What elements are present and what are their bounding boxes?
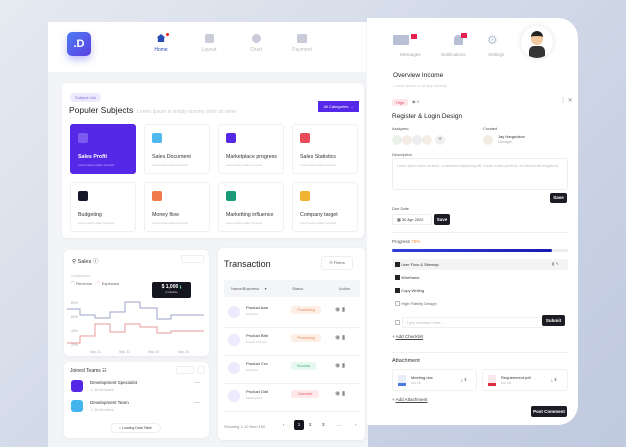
line chart: Sep 22 bbox=[119, 350, 130, 354]
right panel: task detail: ⤓ ▮ bbox=[551, 377, 557, 382]
subject grid: Sales Document bbox=[152, 154, 191, 160]
subject grid: Lorem ipsum dolor sit amet bbox=[78, 221, 114, 225]
subject grid: Lorem ipsum dolor sit amet bbox=[152, 221, 188, 225]
tooltip: profitable bbox=[165, 290, 178, 294]
nav: chart: Chart bbox=[250, 47, 262, 53]
right panel: task detail: ⋮ ✕ bbox=[560, 98, 573, 104]
checklist: Submit bbox=[546, 318, 561, 323]
panel: transaction: ... bbox=[337, 422, 341, 427]
line chart: 80% bbox=[71, 301, 78, 305]
right panel: task detail: Requirement.pdf bbox=[501, 375, 531, 380]
checklist: Wireframe bbox=[401, 275, 420, 280]
right panel: task detail: ▦ 30 Apr 2022 bbox=[397, 217, 423, 222]
creator bbox=[483, 135, 493, 145]
all categories button bbox=[318, 101, 359, 112]
all categories button: All Categories → bbox=[323, 104, 354, 109]
tooltip: $ 1,000 + bbox=[162, 284, 181, 290]
panel: transaction: ‹ bbox=[283, 422, 284, 427]
right panel: task detail: Lorem ipsum dolor sit amet, consectetur adipiscing elit. Donec mattis porta mi, vel ultrices elit fringilla eu. bbox=[397, 164, 559, 168]
post comment button bbox=[531, 406, 567, 417]
subject grid: Sales Profit bbox=[78, 154, 107, 160]
top icons bbox=[393, 35, 409, 45]
right panel: task detail: Manager bbox=[498, 140, 512, 144]
checklist bbox=[392, 259, 568, 328]
subject grid: Marketplace progress bbox=[226, 154, 277, 160]
rows: Processing bbox=[297, 336, 315, 340]
checklist: High Fidelity Design bbox=[401, 301, 437, 306]
subject grid: Sales Statistics bbox=[300, 154, 336, 160]
panel: transaction bbox=[218, 248, 365, 440]
nav: home bbox=[154, 33, 169, 53]
panel: sales chart: Comparison bbox=[71, 274, 90, 278]
subject grid: Lorem ipsum dolor sit amet bbox=[152, 163, 188, 167]
rows: Product Ddd bbox=[246, 389, 268, 394]
pagination: Showing 1-10 from 100 bbox=[224, 424, 265, 429]
table header bbox=[224, 280, 360, 297]
rows: Software bbox=[246, 368, 258, 372]
right panel: task detail: Lorem Ipsum is simply dummy bbox=[393, 83, 447, 88]
team 1: Development Specialist bbox=[90, 380, 137, 385]
right panel: task detail: ⚙ bbox=[487, 33, 498, 47]
right panel: task detail: Assigned bbox=[392, 126, 408, 131]
right panel: task detail: + Add Checklist bbox=[392, 334, 423, 339]
rows bbox=[224, 305, 360, 412]
right panel: task detail: Save bbox=[553, 195, 564, 200]
table header: Status bbox=[292, 286, 303, 291]
line chart: 40% bbox=[71, 329, 78, 333]
nav: layout bbox=[201, 34, 216, 53]
right panel: task detail: Meeting.doc bbox=[411, 375, 433, 380]
right panel: task detail: Save bbox=[437, 217, 447, 222]
checklist: User Flow & Sitemap bbox=[401, 262, 439, 267]
team 2: ··· bbox=[194, 400, 200, 406]
rows: Success bbox=[297, 364, 310, 368]
nav: home: Home bbox=[154, 47, 168, 53]
line chart bbox=[67, 301, 204, 354]
checklist: Copy Writing bbox=[401, 288, 424, 293]
team 1: ♙ 36 Members bbox=[90, 388, 114, 392]
right panel: task detail: Settings bbox=[488, 52, 504, 57]
panel: sales chart: ⚲ Sales ⓘ bbox=[72, 259, 98, 265]
right panel: task detail: Messages bbox=[400, 52, 421, 57]
post comment button: Post Comment bbox=[533, 409, 565, 414]
rows: Software bbox=[246, 312, 258, 316]
subject grid: Marketting influence bbox=[226, 212, 273, 218]
nav: layout: Layout bbox=[201, 47, 216, 53]
panel: joined teams: Joined Teams ☷ bbox=[70, 368, 107, 374]
panel: transaction: 3 bbox=[322, 422, 325, 427]
tags bbox=[392, 99, 408, 106]
nav: chart bbox=[250, 34, 262, 53]
rows: ◉ ▮ bbox=[335, 363, 345, 369]
panel: sales chart bbox=[64, 250, 209, 356]
panel: transaction: ☷ Filters bbox=[329, 260, 345, 265]
line chart: 20% bbox=[71, 343, 78, 347]
team 1: ··· bbox=[194, 380, 200, 386]
table header: Action bbox=[339, 286, 350, 291]
attachments: Attachment bbox=[392, 358, 420, 364]
checklist: ▮ ✎ bbox=[552, 261, 559, 266]
right panel: task detail: + Add Attachment bbox=[392, 397, 427, 402]
logo bbox=[67, 32, 91, 56]
assigned avatars bbox=[392, 135, 432, 145]
rows: Marketplace bbox=[246, 396, 262, 400]
line chart: Sep 21 bbox=[90, 350, 101, 354]
left app area bbox=[48, 22, 368, 447]
subject grid: Company target bbox=[300, 212, 338, 218]
panel: popular subjects bbox=[62, 83, 364, 238]
rows: ◉ ▮ bbox=[335, 307, 345, 313]
nav: payment bbox=[292, 34, 312, 53]
right panel: task detail: 500 KB bbox=[501, 381, 511, 385]
line chart: 60% bbox=[71, 315, 78, 319]
panel: sales chart: ⌒ Revenue ⌒ Expenses bbox=[71, 281, 119, 286]
right panel: task detail: Notifications bbox=[441, 52, 466, 57]
table header: Name/Business ▾ bbox=[231, 286, 267, 291]
panel: transaction: 2 bbox=[309, 422, 312, 427]
due date: Due Date bbox=[392, 206, 409, 211]
subject grid: Lorem ipsum dolor sit amet bbox=[300, 163, 336, 167]
panel: transaction: › bbox=[355, 422, 356, 427]
subject grid: Lorem ipsum dolor sit amet bbox=[78, 163, 114, 167]
rows: Private Account bbox=[246, 340, 267, 344]
right panel: task detail: 500 KB bbox=[411, 381, 421, 385]
right panel: task detail: ⤓ ▮ bbox=[461, 377, 467, 382]
task title: Register & Login Design bbox=[392, 113, 462, 120]
line chart: Sep 23 bbox=[148, 350, 159, 354]
subject grid: Lorem ipsum dolor sit amet bbox=[226, 163, 262, 167]
rows: ◉ ▮ bbox=[335, 391, 345, 397]
description: Description bbox=[392, 152, 412, 157]
right panel: task detail: Jay Hargudson bbox=[498, 134, 525, 139]
panel: joined teams bbox=[64, 362, 209, 438]
subject grid: Lorem ipsum dolor sit amet bbox=[300, 221, 336, 225]
rows: ◉ ▮ bbox=[335, 335, 345, 341]
logo: .D bbox=[74, 38, 84, 50]
line chart: Sep 24 bbox=[178, 350, 189, 354]
right panel: task detail: + bbox=[438, 136, 442, 143]
panel: joined teams: ○ Loading Data Table bbox=[119, 426, 152, 430]
checklist: Type checklist here.... bbox=[406, 320, 445, 325]
progress: Progress 75% bbox=[392, 239, 420, 244]
subject grid bbox=[70, 124, 358, 232]
overview heading: Overview Income bbox=[393, 72, 443, 79]
team 1 bbox=[71, 380, 200, 392]
subject grid: Lorem ipsum dolor sit amet bbox=[226, 221, 262, 225]
nav: payment: Payment bbox=[292, 47, 312, 53]
subject grid: Budgeting bbox=[78, 212, 102, 218]
subject grid: Money flow bbox=[152, 212, 179, 218]
rows: Canceled bbox=[298, 392, 312, 396]
tooltip bbox=[152, 282, 191, 298]
rows: Processing bbox=[297, 308, 315, 312]
panel: transaction: 1 bbox=[298, 422, 300, 427]
team 2 bbox=[71, 400, 200, 412]
right panel: task detail: ◉ 3 bbox=[412, 99, 419, 104]
rows: Product Bbb bbox=[246, 333, 268, 338]
team 2: Development Team bbox=[90, 400, 129, 405]
panel: popular subjects: Subject List bbox=[75, 95, 96, 100]
avatar bbox=[521, 26, 553, 58]
team 2: ♙ 36 Members bbox=[90, 408, 114, 412]
header bar bbox=[48, 22, 366, 72]
tags: High bbox=[396, 100, 404, 105]
heading: Populer Subjects Lorem Ipsum is simply dummy dolor sit amet bbox=[69, 105, 236, 115]
panel: transaction: Transaction bbox=[224, 259, 271, 269]
right panel: task detail: Created bbox=[483, 126, 497, 131]
rows: Product Ccc bbox=[246, 361, 268, 366]
right panel: task detail bbox=[367, 18, 578, 425]
rows: Product Aaa bbox=[246, 305, 268, 310]
